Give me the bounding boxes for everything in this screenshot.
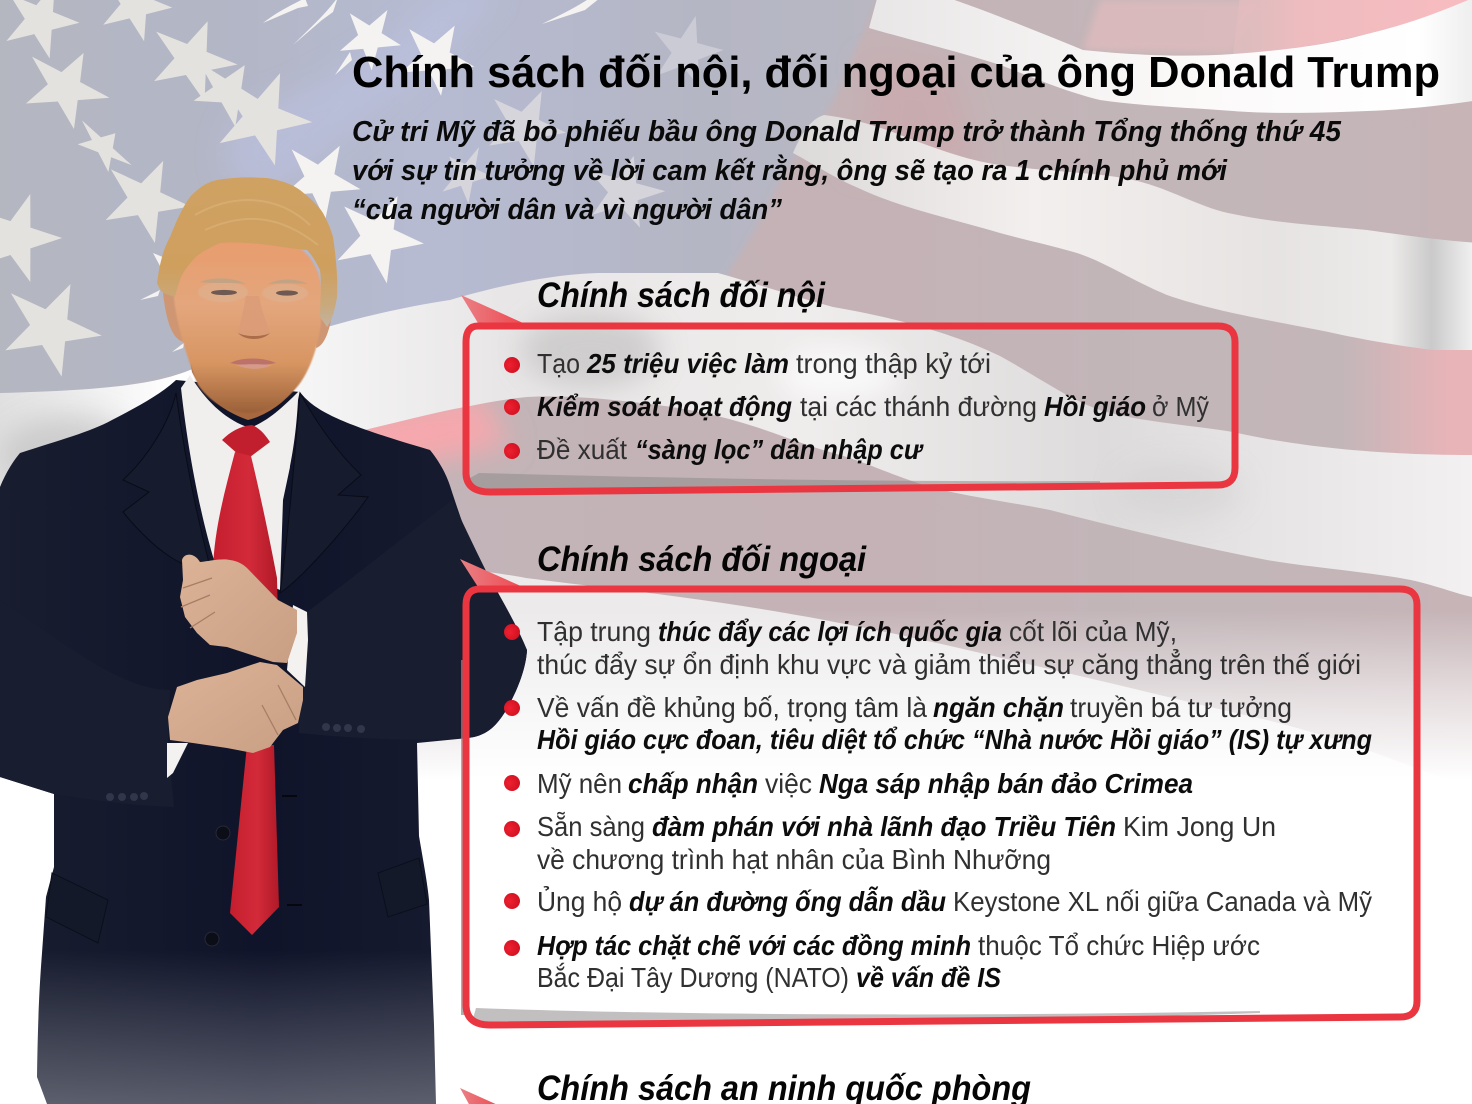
- bullets: [504, 357, 520, 459]
- list items: trong thập kỷ tới: [796, 348, 991, 379]
- list items: Hồi giáo: [1044, 391, 1146, 422]
- intro text: với sự tin tưởng về lời cam kết rằng, ông sẽ tạo ra 1 chính phủ mới: [352, 153, 1228, 187]
- shirt cuffs: [167, 605, 308, 778]
- list items: Tạo: [537, 348, 580, 379]
- portrait: Donald Trump: [0, 177, 527, 1104]
- neck: [190, 360, 300, 420]
- panel: domestic policy: [461, 295, 1235, 492]
- intro text: Cử tri Mỹ đã bỏ phiếu bầu ông Donald Trump trở thành Tổng thống thứ 45: [352, 116, 1342, 148]
- list items: Hợp tác chặt chẽ với các đồng minh: [537, 930, 971, 961]
- list items: “sàng lọc” dân nhập cư: [635, 434, 924, 465]
- list items: Keystone XL nối giữa Canada và Mỹ: [953, 886, 1372, 917]
- list items: ở Mỹ: [1152, 391, 1209, 422]
- list items: thuộc Tổ chức Hiệp ước: [978, 930, 1260, 961]
- list items: về vấn đề IS: [856, 962, 1001, 993]
- bullets: [504, 624, 520, 956]
- suit jacket: [0, 380, 527, 1104]
- lapels: [123, 393, 368, 593]
- speech tail: security panel: [460, 1088, 500, 1104]
- list items: đàm phán với nhà lãnh đạo Triều Tiên: [652, 811, 1116, 842]
- intro text: “của người dân và vì người dân”: [352, 194, 782, 226]
- list items: Nga sáp nhập bán đảo Crimea: [819, 768, 1193, 799]
- lower hand: [168, 662, 303, 753]
- list items: ngăn chặn: [933, 692, 1064, 723]
- title: Chính sách đối nội, đối ngoại của ông Donald Trump: [352, 48, 1440, 97]
- intro text: [352, 116, 1342, 226]
- list items: [537, 348, 1209, 465]
- list items: Ủng hộ: [537, 885, 622, 917]
- list items: Kiểm soát hoạt động: [537, 391, 792, 422]
- flag background: [0, 0, 1472, 760]
- list items: thúc đẩy các lợi ích quốc gia: [658, 616, 1002, 647]
- list items: Đề xuất: [537, 434, 627, 465]
- face: [174, 235, 322, 413]
- necktie: [213, 425, 279, 935]
- list items: về chương trình hạt nhân của Bình Nhưỡng: [537, 844, 1051, 875]
- list items: truyền bá tư tưởng: [1070, 692, 1292, 723]
- heading: domestic policy: Chính sách đối nội: [537, 276, 826, 315]
- list items: Sẵn sàng: [537, 811, 645, 842]
- hair: [157, 177, 337, 327]
- list items: dự án đường ống dẫn dầu: [629, 886, 946, 917]
- panel: foreign policy: [460, 559, 1417, 1025]
- list items: cốt lõi của Mỹ,: [1009, 616, 1177, 647]
- list items: Mỹ nên: [537, 768, 622, 799]
- list items: 25 triệu việc làm: [586, 348, 789, 379]
- list items: Bắc Đại Tây Dương (NATO): [537, 962, 849, 993]
- facial features: [198, 278, 308, 369]
- fade over lower suit: [30, 950, 450, 1104]
- list items: Tập trung: [537, 616, 651, 647]
- list items: tại các thánh đường: [800, 391, 1037, 422]
- list items: Về vấn đề khủng bố, trọng tâm là: [537, 692, 927, 723]
- list items: Hồi giáo cực đoan, tiêu diệt tổ chức “Nhà nước Hồi giáo” (IS) tự xưng: [537, 724, 1372, 755]
- list items: Kim Jong Un: [1123, 811, 1276, 842]
- list items: việc: [765, 768, 812, 799]
- ears: [163, 292, 334, 348]
- list items: thúc đẩy sự ổn định khu vực và giảm thiểu sự căng thẳng trên thế giới: [537, 648, 1361, 680]
- upper hand: [180, 555, 297, 663]
- list items: chấp nhận: [628, 768, 758, 799]
- heading: foreign policy: Chính sách đối ngoại: [537, 540, 867, 579]
- shirt and collar: [181, 375, 300, 590]
- lower details: sleeves, buttons, pockets: [0, 500, 527, 946]
- list items: [537, 616, 1372, 993]
